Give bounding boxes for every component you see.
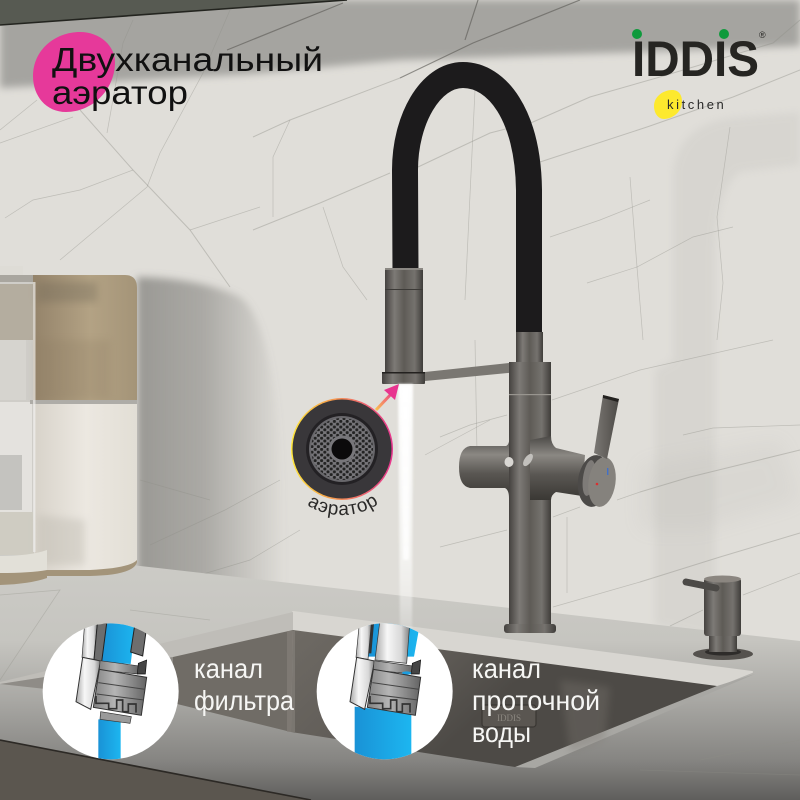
yellow kitchen mark xyxy=(654,90,682,119)
water stream xyxy=(398,384,413,630)
sink rim xyxy=(293,612,752,686)
jar base xyxy=(0,550,47,577)
aerator callout xyxy=(291,384,399,518)
sink drain cover with brand mark xyxy=(482,705,536,727)
cream lower canister xyxy=(35,404,137,570)
handle disc xyxy=(575,453,619,509)
aerator disc xyxy=(292,400,392,498)
label: filter channel xyxy=(194,653,294,716)
left cold side cylinder xyxy=(459,436,509,498)
right handle cylinder xyxy=(504,436,585,500)
horizontal arm xyxy=(425,362,540,381)
title xyxy=(33,32,323,112)
brand logo: IDDIS xyxy=(632,31,759,87)
label: filter channel: фильтра xyxy=(194,685,294,716)
brand logo xyxy=(632,29,766,119)
lever xyxy=(594,395,619,459)
kitchen appliance on left xyxy=(0,266,137,585)
countertop and sink xyxy=(0,550,800,800)
label: flow-through channel xyxy=(472,653,600,748)
tan upper canister xyxy=(33,275,137,402)
shelf underside xyxy=(0,0,347,25)
flow-through channel cutaway xyxy=(317,620,453,763)
pull-out spray head xyxy=(382,268,425,384)
pink blob xyxy=(33,32,115,112)
main vertical body xyxy=(504,332,556,633)
glass jar xyxy=(0,266,36,555)
filter channel cutaway xyxy=(43,620,179,763)
title: аэратор xyxy=(52,74,188,111)
sink interior xyxy=(0,657,173,703)
label: flow-through channel: проточной xyxy=(472,685,600,716)
title: Двухканальный xyxy=(52,41,323,78)
brand logo: kitchen xyxy=(667,97,726,112)
tan base band xyxy=(47,560,137,576)
curved label: аэратор xyxy=(308,496,377,518)
soap dispenser xyxy=(686,576,753,660)
sink drain cover with brand mark: IDDIS xyxy=(497,713,521,723)
flexible black hose xyxy=(405,75,529,336)
arrow to spout xyxy=(376,384,399,410)
gradient ring xyxy=(291,398,393,500)
marble veins xyxy=(0,10,800,626)
label: flow-through channel: воды xyxy=(472,717,531,748)
brand logo: ® xyxy=(759,30,766,40)
wooden cabinet front xyxy=(0,740,311,800)
faucet xyxy=(382,75,619,633)
label: filter channel: канал xyxy=(194,653,263,684)
label: flow-through channel: канал xyxy=(472,653,541,684)
